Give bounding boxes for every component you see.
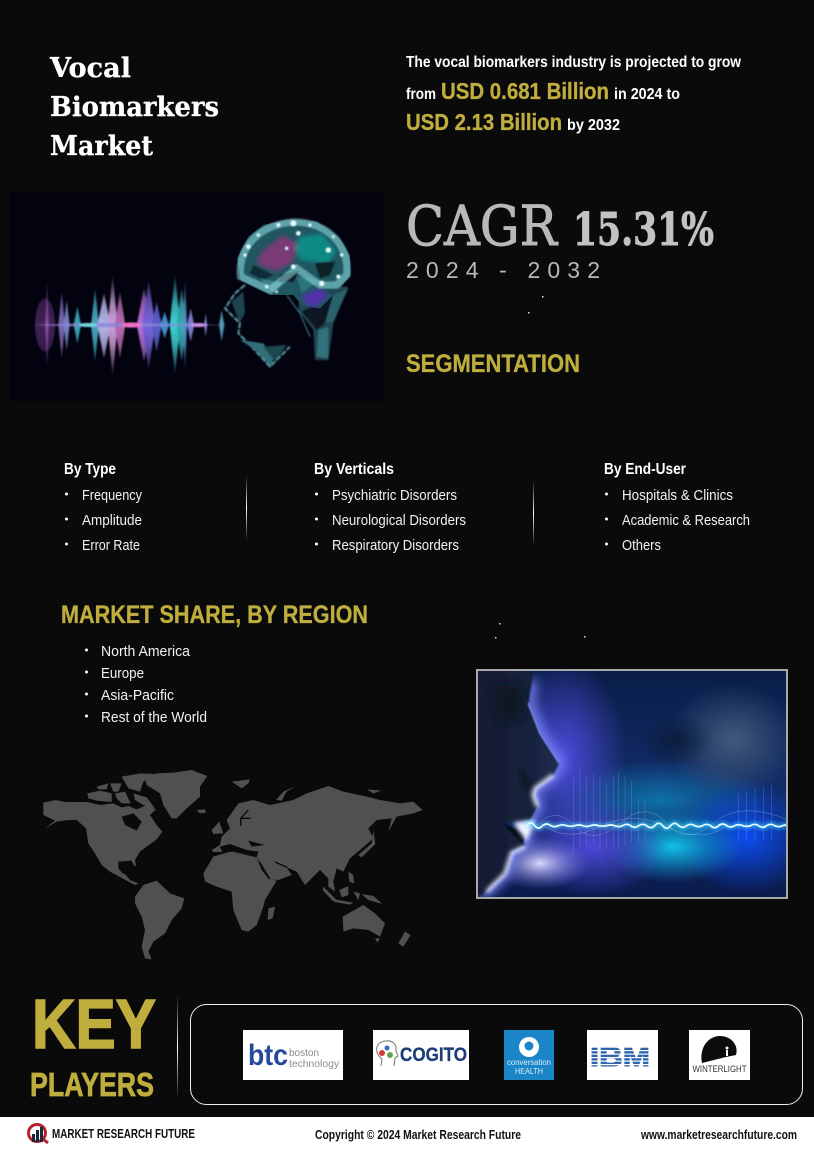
segment: by end-user: Others	[622, 537, 661, 554]
face	[477, 670, 559, 895]
greenland	[145, 770, 207, 818]
arctic islands	[122, 773, 155, 792]
footer logo: MARKET RESEARCH FUTURE	[52, 1127, 195, 1141]
CAGR: 15.31%	[573, 203, 714, 256]
hudson bay and seas	[122, 813, 142, 831]
segment: by verticals	[314, 461, 466, 554]
logo: ibm: IBM	[590, 1042, 650, 1072]
brain	[237, 219, 351, 308]
region list: Europe	[101, 665, 144, 682]
voice wave	[527, 823, 791, 828]
logo: boston technology	[243, 1030, 343, 1080]
segment: by type	[64, 461, 142, 554]
segment: by verticals: Respiratory Disorders	[332, 537, 459, 554]
logo: conversation health: HEALTH	[515, 1066, 543, 1076]
light glow	[574, 764, 752, 831]
logo: conversation health	[504, 1030, 554, 1080]
title	[49, 53, 219, 162]
key players heading: KEY	[32, 985, 156, 1063]
footer: Copyright © 2024 Market Research Future	[315, 1128, 521, 1142]
segment: by verticals: Neurological Disorders	[332, 512, 466, 529]
segment: by end-user: Hospitals & Clinics	[622, 487, 733, 504]
logo: boston technology: btc	[248, 1039, 288, 1072]
segment: by type: Amplitude	[82, 512, 142, 529]
CAGR: CAGR	[406, 194, 558, 258]
key players heading: PLAYERS	[30, 1066, 154, 1103]
africa	[203, 852, 277, 932]
market projection text: USD 2.13 Billion	[406, 109, 562, 135]
decorative specks	[495, 296, 586, 638]
key players panel	[190, 1004, 802, 1104]
inland water lines	[241, 810, 287, 879]
logo: boston technology: technology	[289, 1058, 340, 1070]
CAGR: 2024 - 2032	[406, 257, 600, 283]
footer logo	[28, 1124, 195, 1143]
market projection text: by 2032	[567, 117, 620, 134]
sound wave bars	[35, 273, 224, 377]
world map	[43, 770, 423, 959]
segment: by verticals: Psychiatric Disorders	[332, 487, 457, 504]
market projection text: The vocal biomarkers industry is projected to grow	[406, 54, 741, 71]
CAGR	[406, 194, 714, 283]
segment: by type: Error Rate	[82, 537, 140, 554]
footer	[0, 1117, 814, 1150]
segment: by end-user: By End-User	[604, 461, 686, 478]
region list: Rest of the World	[101, 709, 207, 726]
logo: ibm	[587, 1030, 658, 1080]
logo: cogito: COGITO	[400, 1045, 467, 1066]
head outline	[225, 285, 348, 367]
logo: boston technology: boston	[289, 1047, 319, 1059]
segment: by verticals: By Verticals	[314, 461, 394, 478]
title: Vocal	[49, 53, 131, 84]
market projection text	[406, 54, 741, 135]
heading: market share by region: MARKET SHARE, BY REGION	[61, 601, 368, 629]
market projection text: from	[406, 86, 436, 103]
north america	[43, 800, 162, 885]
face glow	[482, 680, 559, 895]
market projection text: USD 0.681 Billion	[441, 78, 609, 104]
southeast asia and oceania	[328, 878, 335, 892]
key players heading	[30, 985, 156, 1103]
image: voice profile	[476, 669, 788, 899]
region list: North America	[101, 643, 191, 660]
market projection text: in 2024 to	[614, 86, 680, 103]
segment: by end-user: Academic & Research	[622, 512, 750, 529]
segment: by type: By Type	[64, 461, 116, 478]
heading: segmentation: SEGMENTATION	[406, 350, 580, 378]
logo: winterlight: WINTERLIGHT	[692, 1064, 747, 1075]
segment: by end-user	[604, 461, 750, 554]
region list: Asia-Pacific	[101, 687, 174, 704]
bars	[573, 767, 772, 853]
eurasia	[212, 786, 423, 885]
logo: conversation health: conversation	[507, 1058, 551, 1067]
region list	[85, 643, 207, 726]
image: sound wave and brain	[34, 217, 352, 377]
title: Market	[50, 131, 153, 162]
logo: winterlight	[689, 1030, 750, 1080]
logo: cogito	[373, 1030, 469, 1080]
south america	[135, 881, 184, 959]
segment: by type: Frequency	[82, 487, 142, 504]
title: Biomarkers	[50, 92, 219, 123]
